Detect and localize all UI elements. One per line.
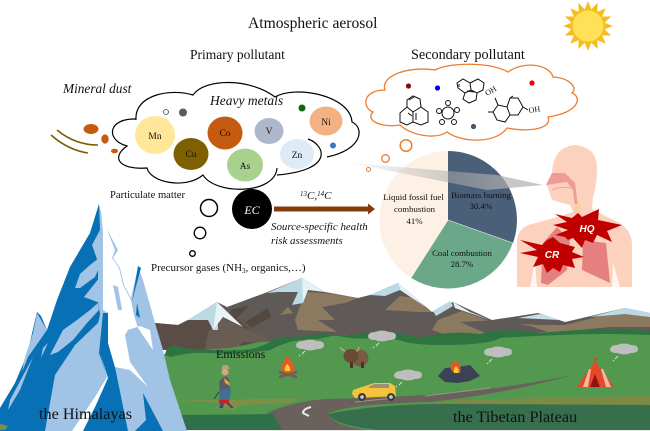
small particles — [164, 104, 336, 148]
metal circles: Zn — [292, 151, 303, 161]
pie labels: 30.4% — [470, 201, 493, 211]
text: heavy metals: Heavy metals — [209, 93, 283, 108]
orange thought bubbles — [366, 140, 412, 172]
title: Atmospheric aerosol — [248, 15, 378, 32]
molecules — [400, 79, 528, 125]
burst: HQ: HQ — [580, 224, 595, 235]
arrow: EC to pie — [274, 204, 375, 214]
heading: secondary pollutant: Secondary pollutant — [411, 47, 525, 63]
metal circles: V — [266, 127, 273, 137]
burst: HQ — [553, 209, 622, 248]
pie labels: 41% — [406, 216, 423, 226]
icon: sun — [563, 1, 613, 51]
foreground dark field — [328, 404, 650, 430]
pie chart: source contributions — [379, 151, 517, 289]
label: the Himalayas: the Himalayas — [39, 405, 132, 423]
pie labels — [383, 190, 512, 269]
metal circles: Co — [219, 129, 231, 139]
pie labels: 28.7% — [451, 259, 474, 269]
icon: burning coal — [438, 360, 480, 383]
heavy metals cloud — [112, 82, 359, 189]
icon: herder — [214, 365, 234, 408]
label: precursor gases: , organics,…) — [246, 262, 306, 274]
road — [267, 375, 572, 431]
label: isotopes: C — [324, 190, 332, 202]
secondary pollutant cloud — [366, 64, 577, 140]
secondary pollutant cloud: OH — [528, 104, 541, 115]
label: source-specific health risk assessments: Source-specific health — [271, 221, 368, 233]
label: the Tibetan Plateau: the Tibetan Plateau — [453, 408, 577, 426]
label: source-specific health risk assessments: risk assessments — [271, 235, 343, 247]
icon: yak — [340, 347, 368, 368]
icon: tent — [577, 358, 614, 387]
text: OH groups: OH — [484, 84, 498, 98]
icon: car — [352, 383, 396, 401]
EC circle: EC — [243, 203, 261, 217]
label: isotopes: 14 — [317, 190, 325, 198]
the Himalayas mountain — [0, 204, 187, 431]
pie labels: Biomass burning — [451, 190, 512, 200]
thought bubbles — [190, 200, 218, 256]
metal circles: Ni — [321, 118, 331, 128]
icon: campfire — [279, 356, 297, 377]
metal circles — [135, 106, 342, 182]
landscape: Tibetan Plateau — [0, 278, 650, 431]
label: isotopes: C, — [307, 190, 317, 202]
metal circles: Mn — [148, 132, 162, 142]
label: precursor gases: Precursor gases (NH — [151, 262, 242, 274]
metal circles: As — [240, 162, 251, 172]
burst: CR — [520, 237, 584, 273]
label: particulate matter: Particulate matter — [110, 190, 185, 201]
olive path strip — [178, 398, 300, 410]
nasal airway — [546, 173, 578, 207]
lungs — [541, 227, 570, 285]
human torso and head — [517, 145, 632, 287]
foreground field — [182, 414, 283, 431]
bottom strip — [0, 430, 650, 431]
label: isotopes: 13 — [300, 190, 308, 198]
colored particles — [406, 80, 535, 129]
label: mineral dust: Mineral dust — [62, 81, 132, 96]
icon: mineral dust wind — [51, 124, 118, 153]
pie labels: Coal combustion — [432, 248, 493, 258]
label: Emissions: Emissions — [216, 347, 266, 361]
gray inhalation beam — [350, 163, 543, 190]
distant snowy mountains — [155, 278, 650, 350]
label: precursor gases: 3 — [242, 267, 246, 275]
metal circles: Cu — [185, 150, 197, 160]
EC circle — [232, 189, 272, 229]
green meadow — [162, 331, 650, 431]
smoke clouds — [296, 330, 638, 387]
pie labels: combustion — [394, 204, 436, 214]
tree line — [165, 329, 650, 357]
heading: primary pollutant: Primary pollutant — [190, 47, 285, 62]
burst: CR: CR — [545, 250, 560, 261]
pie labels: Liquid fossil fuel — [383, 192, 444, 202]
